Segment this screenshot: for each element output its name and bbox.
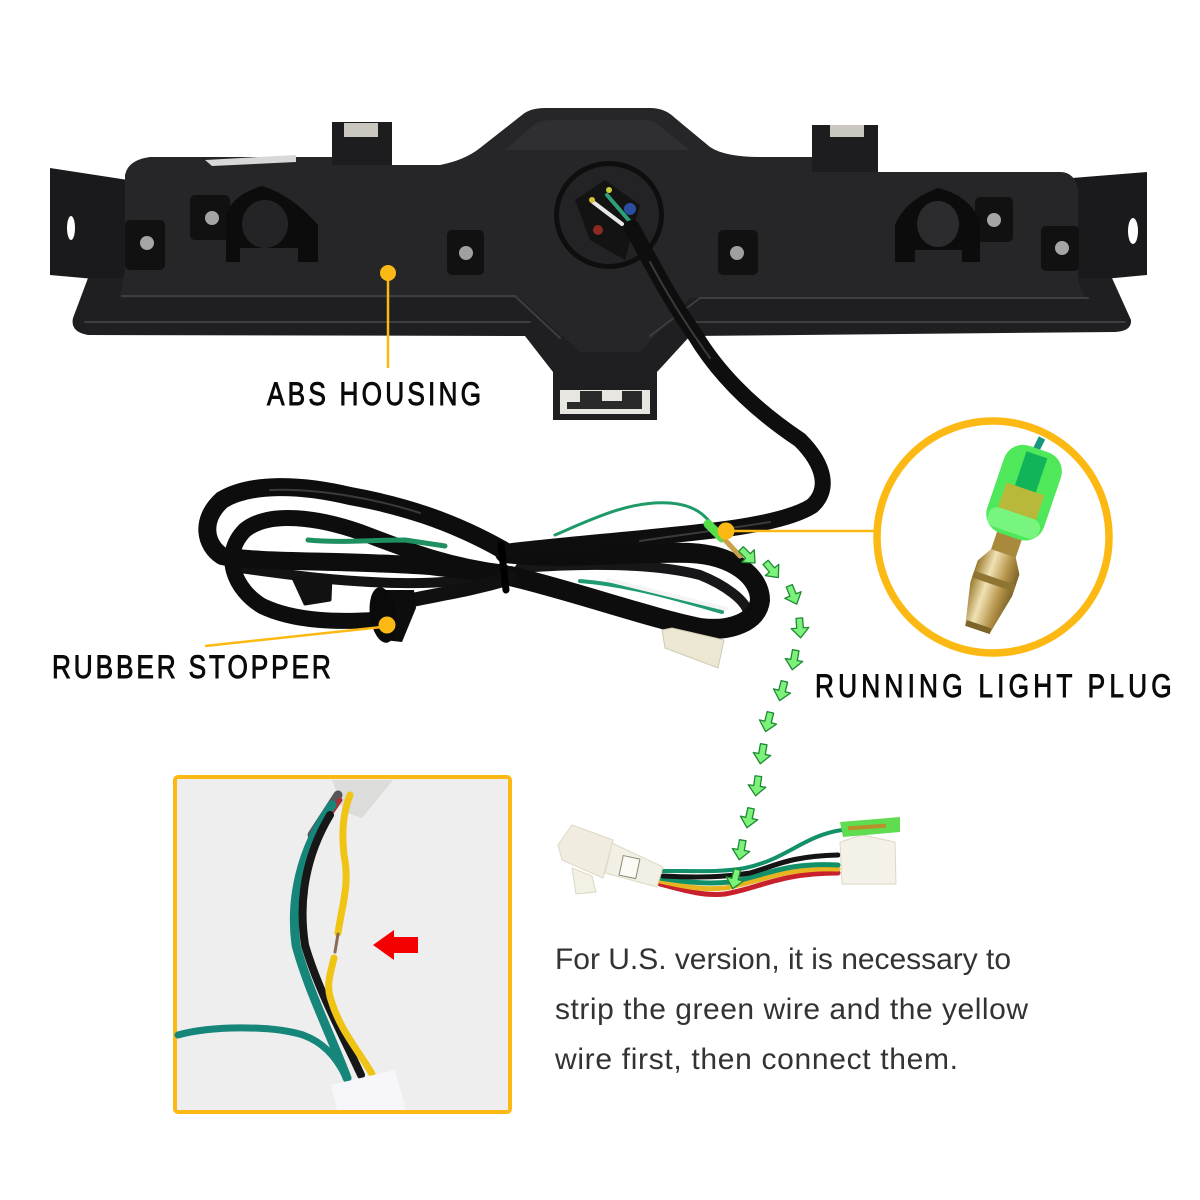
arrow 3 <box>781 583 805 607</box>
line 1: For U.S. version, it is necessary to <box>555 943 1011 976</box>
right mounting flange <box>1072 172 1147 282</box>
lower yellow wire <box>329 958 372 1074</box>
right connector body <box>840 835 896 884</box>
leader: ABS housing <box>380 265 396 368</box>
arrow 10 <box>738 806 760 830</box>
arrow 9 <box>747 775 767 797</box>
brass body <box>957 546 1024 636</box>
leader: running light plug <box>718 522 876 540</box>
bundle tie <box>501 545 506 590</box>
brass tip <box>965 620 992 634</box>
arrow 1 <box>735 543 761 569</box>
exposed copper <box>335 934 338 952</box>
black wire <box>663 855 838 877</box>
yellow wire <box>660 869 838 889</box>
left connector neck <box>605 843 663 887</box>
leader line <box>726 530 876 532</box>
lower plate and stem <box>73 278 1131 420</box>
white sliver highlight on housing top edge <box>205 155 296 166</box>
left top tab <box>332 122 392 172</box>
callout circle: plug detail <box>877 421 1109 653</box>
panel frame <box>175 777 510 1112</box>
label: ABS housing: ABS HOUSING <box>267 378 481 413</box>
bottom white connector <box>331 1070 406 1110</box>
leader line <box>205 627 382 646</box>
upper bundle grey <box>312 795 338 835</box>
adapter wiring harness <box>558 817 900 895</box>
red pointer arrow <box>373 930 418 960</box>
large upper loop cable <box>207 487 505 575</box>
leader: rubber stopper <box>205 616 396 646</box>
green plug <box>840 817 900 837</box>
arrow 2 <box>759 557 785 583</box>
panel: stripped wire photo <box>175 777 510 1112</box>
ABS housing lamp <box>50 108 1147 420</box>
line 2: strip the green wire and the yellow <box>555 993 1028 1026</box>
arrow 8 <box>752 743 772 765</box>
stopper neck cable <box>412 578 510 600</box>
leader line <box>387 272 389 368</box>
label: running light plug: RUNNING LIGHT PLUG <box>815 670 1172 705</box>
right loop inner wire <box>520 565 748 612</box>
small screw mount right inner <box>975 197 1013 242</box>
right adjuster knob <box>895 188 980 262</box>
green wire lower <box>660 865 838 883</box>
upper housing body <box>120 108 1085 352</box>
main cable from housing to bundle <box>505 228 823 552</box>
green wire to plug <box>663 830 842 871</box>
instruction text <box>554 943 1028 1076</box>
ridge lines <box>85 296 1125 338</box>
stub green wire <box>308 540 445 546</box>
small brass pin on cable <box>724 539 740 556</box>
dark lump inside loop <box>293 576 331 604</box>
right loop cable <box>505 553 760 629</box>
brass pin in plug <box>848 824 886 830</box>
green shell <box>981 439 1067 546</box>
arrow 11 <box>731 839 751 861</box>
cable highlights <box>270 262 770 541</box>
red wire <box>318 800 340 832</box>
last route arrow on wires <box>724 867 746 891</box>
leader dot <box>380 265 396 281</box>
teal wire <box>294 805 347 1078</box>
line 3: wire first, then connect them. <box>554 1043 958 1076</box>
bullet plug <box>949 439 1067 640</box>
small screw mount center right <box>718 230 758 275</box>
neck window <box>619 856 640 879</box>
black wire <box>303 815 361 1075</box>
yellow ring <box>877 421 1109 653</box>
white wire in right loop <box>608 580 726 609</box>
arrow 5 <box>784 649 804 671</box>
shell highlight <box>985 505 1043 541</box>
small screw mount right outer <box>1041 226 1079 271</box>
left connector body <box>558 825 613 878</box>
upper yellow wire <box>338 795 350 933</box>
arrow 6 <box>771 679 793 703</box>
wire grommet <box>554 161 664 269</box>
green wire on main cable <box>555 503 714 535</box>
green wires in right loop <box>580 581 722 612</box>
right top tab <box>812 125 878 176</box>
left mounting flange <box>50 168 128 282</box>
small screw mount left outer <box>125 220 165 270</box>
stem slot <box>560 390 650 414</box>
left adjuster knob <box>226 186 318 262</box>
brass neck <box>990 524 1024 561</box>
harness cable bundle <box>207 228 823 645</box>
right tab metal clip <box>830 125 864 137</box>
leader dot <box>718 522 734 540</box>
arrow 7 <box>757 710 779 734</box>
leader dot <box>378 616 396 634</box>
connection route arrows <box>731 543 809 861</box>
top white connector <box>332 780 393 818</box>
left flange hole <box>67 216 75 240</box>
small screw mount left inner <box>190 195 230 240</box>
red wire <box>660 873 838 895</box>
gold crimp band <box>998 482 1044 520</box>
brass ring <box>972 571 1016 592</box>
left tab metal clip <box>344 123 378 137</box>
stem slot tooth <box>567 391 642 409</box>
small screw mount center left <box>447 230 484 275</box>
right flange hole <box>1128 218 1138 244</box>
rubber stopper <box>366 585 416 645</box>
label: rubber stopper: RUBBER STOPPER <box>52 651 331 686</box>
arrow 4 <box>791 618 809 638</box>
small green connector on cable <box>708 524 722 538</box>
inner loop cable <box>232 518 505 621</box>
white connector on harness <box>662 628 724 668</box>
green core <box>1014 451 1047 494</box>
teal branch wire <box>178 1028 345 1075</box>
wire stub <box>1030 438 1042 462</box>
inner loop lower wire <box>240 568 500 583</box>
top hump inset <box>505 120 690 150</box>
left connector clip <box>572 868 596 894</box>
